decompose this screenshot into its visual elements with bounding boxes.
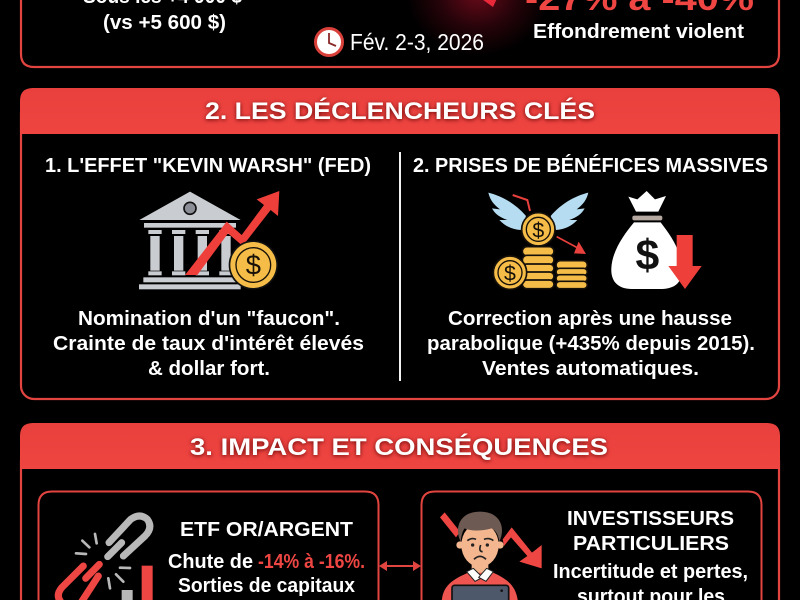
- title: retail investors: [567, 508, 734, 555]
- panel: section 2 triggers: [20, 88, 780, 399]
- panel: section 1 summary: [21, 0, 779, 67]
- text: profit taking explanation: parabolique (+435% depuis 2015).: [427, 333, 755, 355]
- heading: section 3: 3. IMPACT ET CONSÉQUENCES: [190, 433, 608, 461]
- divider: [399, 152, 401, 381]
- glow behind falling arrow: [406, 0, 550, 56]
- text: Warsh explanation: Crainte de taux d'intérêt élevés: [53, 333, 364, 355]
- text: profit taking explanation: Correction après une hausse: [448, 308, 732, 330]
- icon: flying coins and stacks: $: [504, 262, 516, 286]
- icon: clock: [316, 28, 342, 56]
- heading: section 2: 2. LES DÉCLENCHEURS CLÉS: [205, 97, 595, 125]
- title: retail investors: PARTICULIERS: [573, 533, 729, 555]
- heading: section 3: [20, 423, 780, 469]
- text: violent collapse: Effondrement violent: [533, 21, 744, 43]
- text: ETF drop: Chute de: [168, 551, 253, 573]
- icon: worried investor with falling arrow: [440, 512, 542, 600]
- text: retail investors impact: Incertitude et pertes,: [553, 561, 748, 583]
- text: Warsh explanation: [53, 308, 364, 380]
- title: ETF: ETF OR/ARGENT: [180, 519, 353, 541]
- arrow: two-way link between cards: [379, 561, 421, 571]
- card: gold and silver ETF: [38, 492, 378, 600]
- icon: broken chain and bars: [58, 516, 153, 600]
- text: Warsh explanation: & dollar fort.: [148, 358, 270, 380]
- card: retail investors: [422, 492, 762, 600]
- icon: flying coins and stacks: $: [532, 218, 544, 242]
- subheading: profit taking: 2. PRISES DE BÉNÉFICES MASSIVES: [413, 154, 768, 177]
- text: gold price level: (vs +5 600 $): [103, 12, 226, 34]
- text: ETF drop value: -14% à -16%.: [258, 551, 365, 573]
- text: Warsh explanation: Nomination d'un "faucon".: [78, 308, 340, 330]
- subheading: Kevin Warsh: 1. L'EFFET "KEVIN WARSH" (FED): [45, 155, 371, 177]
- icon: falling arrow tip: [472, 0, 500, 7]
- title: retail investors: INVESTISSEURS: [567, 508, 734, 530]
- text: retail investors impact: [553, 561, 748, 600]
- icon: bank with rising arrow and coin: $: [246, 250, 261, 281]
- text: profit taking explanation: Ventes automatiques.: [482, 358, 699, 380]
- text: capital outflows: Sorties de capitaux: [178, 575, 355, 597]
- text: profit taking explanation: [427, 308, 755, 380]
- icon: money bag with down arrow: $: [635, 231, 659, 279]
- text: gold price level: [83, 0, 242, 34]
- heading: section 2: [20, 88, 780, 134]
- panel: section 3 impact: [20, 423, 780, 600]
- icon: bank with rising arrow and coin: [139, 191, 279, 290]
- text: date: Fév. 2-3, 2026: [350, 29, 484, 55]
- icon: flying coins and stacks: [488, 193, 588, 289]
- icon: money bag with down arrow: [611, 191, 702, 289]
